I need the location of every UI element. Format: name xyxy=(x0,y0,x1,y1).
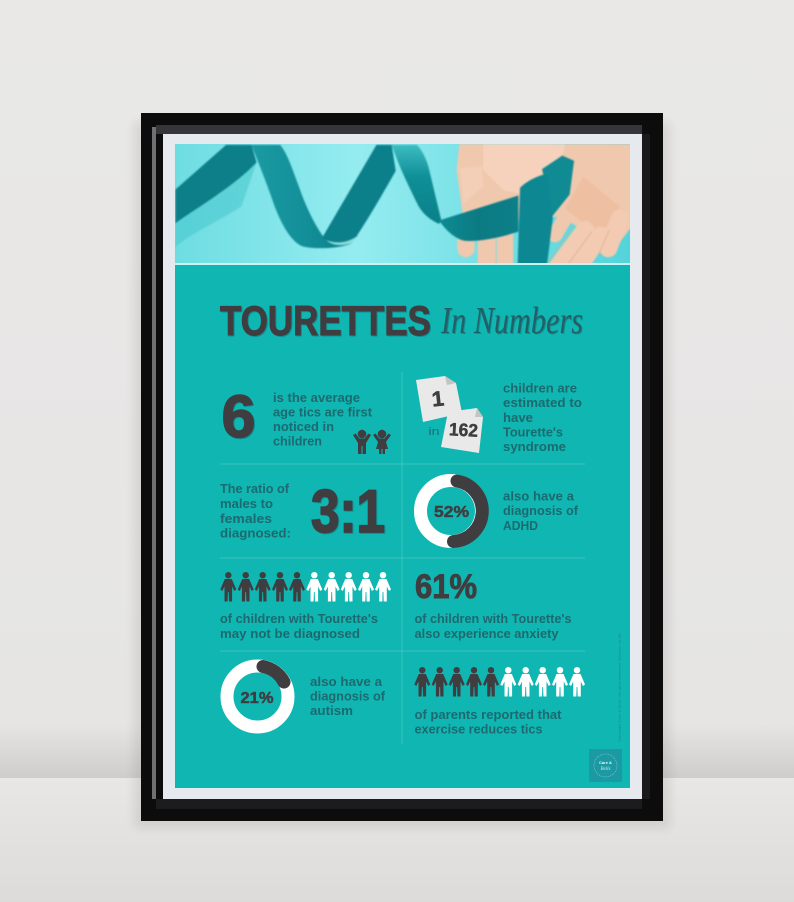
stat text: 1 in 162: children are xyxy=(503,380,577,396)
logo badge xyxy=(589,749,622,782)
stat text: average age: is the average xyxy=(273,390,360,405)
stat text: autism: autism xyxy=(310,703,353,718)
stat: ratio 3:1: 3:1 xyxy=(311,478,385,545)
stat text: average age: noticed in xyxy=(273,419,334,434)
stat: exercise reduces tics xyxy=(414,667,585,736)
stat text: 1 in 162: have xyxy=(503,410,533,425)
icon: paper note 1: 1 xyxy=(431,387,445,411)
donut chart 52%: 52% xyxy=(434,504,469,521)
icon: two children xyxy=(353,430,391,454)
stat: average age 6: 6 xyxy=(222,383,256,450)
grid dividers xyxy=(220,372,585,744)
floor xyxy=(0,778,794,902)
photo: teal ribbon in hands xyxy=(175,144,637,270)
stat text: anxiety: also experience anxiety xyxy=(414,626,559,641)
stat text: autism: also have a xyxy=(310,674,383,689)
title xyxy=(220,297,583,344)
logo badge: Bells xyxy=(600,767,611,772)
ribbon xyxy=(175,145,574,264)
icon: paper note 162 xyxy=(441,408,483,453)
stat text: ADHD: ADHD xyxy=(503,518,538,533)
stat: 1 in 162: in xyxy=(428,426,440,438)
stat text: autism xyxy=(310,674,386,718)
stat text: ADHD: diagnosis of xyxy=(503,503,579,518)
hands xyxy=(457,144,637,270)
stat: ratio 3:1 xyxy=(220,478,385,545)
stat: 61% anxiety: 61% xyxy=(415,568,477,606)
stat text: exercise xyxy=(414,707,562,736)
stat text: exercise: of parents reported that xyxy=(414,707,562,722)
stat text: average age xyxy=(273,390,373,448)
title: TOURETTES xyxy=(220,297,431,344)
stat text: average age: age tics are first xyxy=(273,404,373,420)
stat text: 1 in 162: estimated to xyxy=(503,395,582,410)
stat text: ratio xyxy=(220,481,291,540)
stat text: undiagnosed: may not be diagnosed xyxy=(220,626,360,641)
stat text: ADHD xyxy=(503,488,579,533)
picture frame xyxy=(134,113,670,828)
stat: 52% ADHD xyxy=(420,480,579,542)
white mat xyxy=(163,134,642,799)
stat: average age 6 xyxy=(222,383,391,454)
stat text: undiagnosed xyxy=(220,611,378,641)
stat text: undiagnosed: of children with Tourette's xyxy=(220,611,378,626)
stat text: ratio: males to xyxy=(220,496,273,511)
stat text: anxiety: of children with Tourette's xyxy=(414,611,572,626)
stat text: 1 in 162 xyxy=(503,380,582,454)
stat: 21% autism xyxy=(227,666,386,727)
icon: paper note 1 xyxy=(416,376,462,422)
donut chart 21%: 21% xyxy=(240,690,274,707)
donut chart 21% xyxy=(227,666,288,727)
title: In Numbers xyxy=(440,300,583,342)
stat text: autism: diagnosis of xyxy=(310,688,386,704)
stat text: ADHD: also have a xyxy=(503,488,575,504)
stat text: 1 in 162: Tourette's xyxy=(503,424,563,440)
vertical small print: Copyright Care & Bells. All rights reserved. Sources on file. xyxy=(618,632,622,742)
stat text: ratio: The ratio of xyxy=(220,481,290,496)
stat text: 1 in 162: syndrome xyxy=(503,439,566,454)
donut chart 52% xyxy=(420,480,482,542)
photo divider line xyxy=(175,263,630,265)
icon row: ten people xyxy=(414,667,585,696)
stat text: ratio: females xyxy=(220,511,272,526)
stat: 1 in 162 xyxy=(416,376,582,454)
icon: paper note 162: 162 xyxy=(448,419,479,441)
teal poster panel xyxy=(175,265,630,788)
stat: undiagnosed children xyxy=(220,572,391,641)
icon row: ten people xyxy=(220,572,391,602)
logo badge: Care & xyxy=(599,760,612,765)
stat text: average age: children xyxy=(273,434,322,448)
stat text: exercise: exercise reduces tics xyxy=(414,722,542,736)
stat: 61% anxiety xyxy=(414,568,572,641)
stat text: ratio: diagnosed: xyxy=(220,526,291,540)
stat text: anxiety xyxy=(414,611,572,641)
